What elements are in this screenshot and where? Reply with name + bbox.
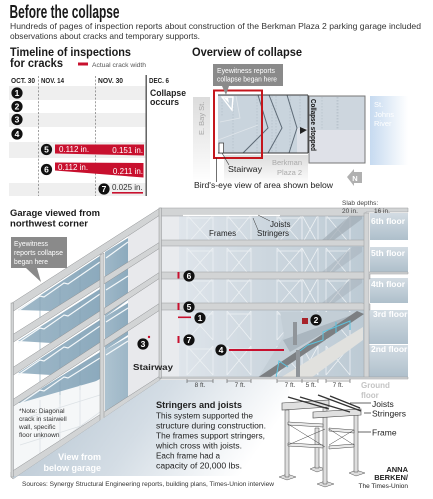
dimension scale: 7 ft. [333,382,344,389]
St. Johns River: Johns [374,110,394,119]
crack marker 2 [302,314,322,326]
dimension scale: 5 ft. [306,382,317,389]
St. Johns River: River [374,119,392,128]
floor labels: 2nd floor [371,344,408,354]
intro text: Hundreds of pages of inspection reports about construction of the Berkman Plaza 2 parking garage included [10,21,421,31]
panel: timeline of inspections [9,45,186,196]
intro text [10,21,421,41]
footnote: floor unknown [19,432,60,439]
stairway label [222,153,263,174]
numbered inspections: 7 [102,184,107,194]
crack marker 2: 2 [314,315,319,325]
panel: garage viewed from northwest corner [10,200,409,490]
crack bar 6 [55,162,144,178]
St. Johns River: St. [374,100,383,109]
crack bar 5: 0.151 in. [112,146,143,155]
eyewitness callout, garage: began here [14,259,48,266]
stringers and joists explainer: Stringers and joists [156,400,242,410]
timeline heading: for cracks [10,56,63,70]
stringers and joists explainer: This system supported the [156,412,254,420]
East Bay Street strip: E. Bay St. [197,102,206,135]
diagram labels: Stringers [372,408,406,418]
stringers and joists explainer: Each frame had a [156,452,221,460]
numbered inspections: 1 [15,88,20,98]
numbered inspections: 5 [44,144,49,154]
eyewitness callout [213,64,283,95]
crack bar 5 [55,144,144,156]
collapse stopped label: Collapse stopped [309,99,318,151]
crack marker 3: 3 [141,339,146,349]
date headers: NOV. 30 [98,76,123,85]
date headers: NOV. 14 [41,76,65,85]
right face of garage [160,208,408,378]
labels: frames, joists, stringers: Stringers [257,229,289,238]
diagram labels [350,399,406,438]
numbered inspections: 2 [15,102,20,112]
icon: stairway [219,143,224,153]
plan of the garage [218,95,365,163]
crack bar 6: 0.211 in. [113,167,143,176]
date headers [11,76,169,85]
icon: north arrow: N [352,174,358,183]
eyewitness callout: Eyewitness reports [217,68,275,75]
crack bar 6: 0.112 in. [58,163,88,172]
stringers and joists explainer: structure during construction. [156,422,266,430]
footnote [18,408,67,439]
stringers and joists explainer: The frames support stringers, [156,432,265,440]
stairway label: Stairway [228,164,263,174]
view from below garage label: below garage [43,463,101,473]
red box: bird's-eye area [214,90,262,158]
floor labels: 4th floor [371,279,406,289]
garage heading: northwest corner [10,218,88,230]
under-garage view [13,380,290,479]
panel: overview of collapse [192,45,408,190]
credit: The Times-Union [358,483,408,490]
intro text: observations about cracks and temporary supports. [10,31,200,41]
view from below garage label [43,452,101,473]
timeline rows [9,86,146,196]
eyewitness callout, garage: Eyewitness [14,241,48,248]
Berkman Plaza 2 ground: Berkman [272,158,302,167]
floor labels [371,216,408,354]
slab depths: 20 in. [342,208,358,215]
garage heading: Garage viewed from [10,208,100,219]
date headers: OCT. 30 [11,76,35,85]
slab depths: Slab depths: [342,200,378,207]
stringers and joists explainer: capacity of 20,000 lbs. [156,462,242,470]
labels: frames, joists, stringers: Joists [270,220,290,229]
labels: frames, joists, stringers [209,215,290,238]
crack marker 4 [215,344,284,356]
credit: ANNA [386,465,409,474]
numbered inspections: 4 [15,129,20,139]
date headers: DEC. 6 [149,76,169,85]
dimension scale: 7 ft. [235,382,246,389]
dimension scale: 8 ft. [195,382,206,389]
footnote: *Note: Diagonal [19,408,65,415]
stringers and joists explainer: which cross with joists. [155,442,242,450]
footnote: crack in stairwell [19,416,67,423]
shoring frames on each floor [187,215,350,375]
crack marker 6 [178,270,195,282]
icon: north arrow [347,169,362,186]
numbered inspections: 6 [44,164,49,174]
crack bar 5: 0.112 in. [59,145,89,154]
crack marker 7: 7 [187,335,192,345]
collapse occurs label [150,88,186,107]
credit: BERKEN/ [374,473,409,482]
numbered inspections: 3 [15,114,20,124]
bird's-eye view label [194,158,334,190]
legend: actual crack width: Actual crack width [92,62,146,69]
timeline heading: Timeline of inspections [10,45,131,59]
timeline heading [10,45,131,70]
ground floor label: floor [361,391,379,400]
Berkman Plaza 2 ground: Plaza 2 [277,168,302,177]
diagram labels: Joists [372,399,394,409]
stringers and joists explainer [155,400,266,470]
footnote: wall, specific [18,424,56,431]
dimension scale: 7 ft. [285,382,296,389]
sources: Sources: Synergy Structural Engineering reports, building plans, Times-Union interview [22,481,274,488]
labels: frames, joists, stringers: Frames [209,229,236,238]
collapse occurs label: Collapse [150,88,186,98]
overview heading: Overview of collapse [192,45,302,59]
crack marker 6: 6 [187,271,192,281]
floor labels: 5th floor [371,248,406,258]
Berkman Plaza 2 ground [224,155,308,185]
left face of garage [11,208,162,479]
eyewitness callout: collapse began here [217,76,277,84]
slab depths [342,200,390,215]
credit [358,465,409,490]
crack bar 7: 0.025 in. [112,183,143,192]
crack marker 5: 5 [187,302,192,312]
stairway label, garage: Stairway [133,362,173,372]
floor labels: 6th floor [371,216,406,226]
crack marker 4: 4 [219,345,224,355]
bird's-eye view label: Bird's-eye view of area shown below [194,180,334,190]
crack marker 7 [178,334,195,346]
crack marker 1 [178,312,206,324]
garage heading [10,208,100,230]
crack marker 3 [137,336,150,350]
ground floor label [361,381,390,400]
floor slabs, right face [160,208,408,379]
crack marker 5 [178,301,195,313]
collapsed section [257,311,364,378]
title: Before the collapse [10,2,120,22]
floor labels: 3rd floor [373,309,408,319]
dimension scale [187,379,350,389]
eyewitness callout, garage: reports collapse [14,250,63,257]
numbered inspections [11,87,110,195]
diagram labels: Frame [372,428,397,438]
diagram: stringers, joists and frame [279,395,365,487]
slab depths: 16 in. [374,208,390,215]
ground floor label: Ground [361,381,390,390]
crack marker 1: 1 [198,313,203,323]
St. Johns River [370,96,408,165]
East Bay Street strip [193,97,210,183]
view from below garage label: View from [58,452,101,462]
eyewitness callout, garage [11,237,67,282]
collapse occurs label: occurs [150,97,179,107]
diagonal ramp shading [322,214,362,303]
